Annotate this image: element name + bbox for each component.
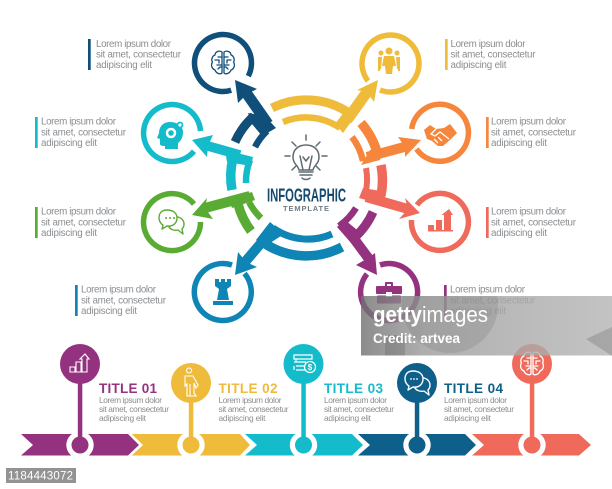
timeline step 2: yellow pin: [171, 363, 211, 459]
text block: green: adipiscing elit: [41, 228, 97, 239]
title block 02: TITLE 02: [218, 381, 278, 396]
title block 01: Lorem ipsum dolor: [99, 395, 162, 405]
text block: blue: sit amet, consectetur: [81, 296, 167, 306]
text block: yellow: sit amet, consectetur: [450, 50, 536, 60]
node: briefcase: [361, 264, 418, 321]
title block 03: [324, 381, 394, 423]
spoke: orange arrow: [352, 123, 421, 165]
text block: green: sit amet, consectetur: [41, 218, 127, 228]
title block 01: sit amet, consectetur: [99, 404, 169, 414]
spoke: blue arrow: [235, 222, 342, 275]
spoke: teal arrow: [192, 135, 253, 190]
spoke: coral arrow: [359, 165, 420, 219]
title block 03: Lorem ipsum dolor: [324, 395, 387, 405]
text block: blue: [75, 284, 167, 317]
text block: coral: Lorem ipsum dolor: [491, 206, 567, 218]
title block 03: adipiscing elit: [324, 413, 372, 423]
spoke: yellow arrow: [272, 80, 378, 133]
text block: coral: sit amet, consectetur: [491, 218, 577, 228]
title block 02: sit amet, consectetur: [218, 404, 289, 414]
text block: orange: adipiscing elit: [491, 138, 547, 149]
text block: dark blue: [88, 39, 182, 71]
timeline arrow band: [21, 434, 591, 456]
text block: orange: [486, 116, 577, 149]
text block: orange: sit amet, consectetur: [491, 128, 577, 138]
spoke: green arrow: [192, 192, 261, 231]
text block: yellow: adipiscing elit: [450, 60, 507, 71]
text block: green: Lorem ipsum dolor: [41, 206, 117, 218]
text block: purple: Lorem ipsum dolor: [450, 284, 526, 296]
text block: coral: [486, 206, 577, 239]
text block: teal: adipiscing elit: [41, 138, 97, 149]
node: brain: [194, 35, 251, 92]
node: chess rook: [194, 263, 251, 320]
title block 04: Lorem ipsum dolor: [444, 395, 507, 405]
timeline step 4: dark blue pin: [397, 363, 437, 459]
title block 04: sit amet, consectetur: [444, 404, 514, 414]
node: people: [362, 35, 419, 92]
heading: INFOGRAPHIC: INFOGRAPHIC: [267, 186, 346, 206]
text block: blue: Lorem ipsum dolor: [81, 284, 157, 296]
title block 01: adipiscing elit: [99, 413, 147, 423]
watermark panel: Credit: artvea: [373, 331, 460, 346]
title block 03: sit amet, consectetur: [324, 404, 394, 414]
node: speech bubbles: [144, 194, 201, 251]
title block 02: Lorem ipsum dolor: [218, 395, 282, 405]
text block: dark blue: sit amet, consectetur: [96, 50, 182, 60]
title block 04: adipiscing elit: [444, 413, 492, 423]
text block: teal: [35, 116, 127, 149]
text block: blue: adipiscing elit: [81, 306, 137, 317]
timeline step 1: purple pin: [60, 344, 100, 459]
text block: coral: adipiscing elit: [491, 228, 547, 239]
text block: orange: Lorem ipsum dolor: [491, 116, 567, 128]
title block 01: [99, 381, 169, 423]
text block: yellow: Lorem ipsum dolor: [450, 39, 526, 50]
title block 03: TITLE 03: [324, 381, 383, 396]
timeline step 3: teal pin: $: [308, 363, 313, 372]
timeline step 5: coral pin: [512, 344, 552, 459]
text block: dark blue: adipiscing elit: [96, 60, 152, 71]
subheading: TEMPLATE: TEMPLATE: [283, 204, 329, 213]
text block: purple: [444, 284, 536, 317]
text block: teal: Lorem ipsum dolor: [41, 116, 117, 128]
watermark panel: [361, 296, 612, 356]
title block 02: adipiscing elit: [218, 413, 266, 423]
title block 04: TITLE 04: [444, 381, 503, 396]
node: gear head: [144, 104, 200, 161]
node: handshake: [412, 104, 468, 161]
title block 04: [444, 381, 514, 423]
node: bar chart: [411, 193, 468, 250]
image id tag: 1184443072: [8, 470, 73, 482]
timeline step 3: teal pin: [284, 344, 324, 459]
icon: light bulb: [285, 135, 327, 180]
watermark panel: gettyimages: [373, 302, 488, 327]
text block: purple: adipiscing elit: [450, 306, 506, 317]
spoke: purple arrow: [337, 208, 377, 275]
spoke: dark blue arrow: [235, 80, 276, 147]
title block 02: [218, 381, 289, 423]
text block: yellow: [445, 39, 536, 71]
text block: teal: sit amet, consectetur: [41, 128, 127, 138]
text block: dark blue: Lorem ipsum dolor: [96, 39, 172, 50]
text block: green: [35, 206, 127, 239]
title block 01: TITLE 01: [99, 381, 157, 396]
text block: purple: sit amet, consectetur: [450, 296, 536, 306]
